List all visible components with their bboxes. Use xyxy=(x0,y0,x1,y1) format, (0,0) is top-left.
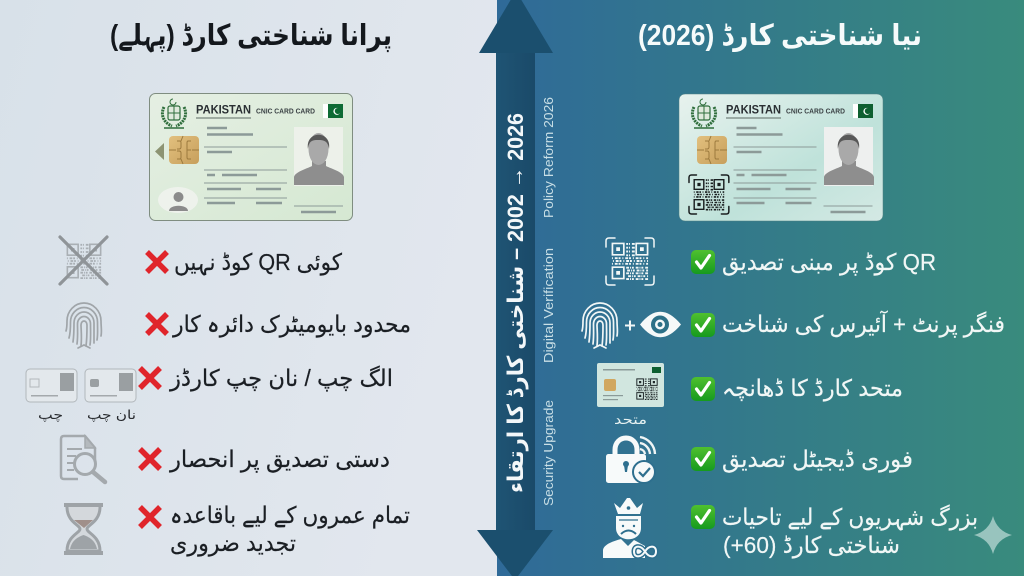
row 2 left: limited biometrics xyxy=(66,303,411,348)
old ID card: CNIC CARD CARD xyxy=(256,106,316,116)
timeline side labels: Digital Verification xyxy=(542,248,556,363)
icon: fingerprint xyxy=(66,303,101,348)
row 4 left: manual verification xyxy=(61,436,390,482)
timeline side labels: Policy Reform 2026 xyxy=(542,97,556,218)
flag xyxy=(853,104,873,118)
row 3 right: unified card xyxy=(597,363,903,427)
double-headed timeline arrow xyxy=(477,0,553,576)
emblem xyxy=(692,99,716,128)
chip xyxy=(697,136,727,164)
icon: QR xyxy=(606,238,654,285)
icon: hourglass xyxy=(64,503,103,555)
icon: fingerprint xyxy=(582,303,617,348)
row 5 left: regular renewal: تجدید ضروری xyxy=(170,530,296,557)
row 2 right: fingerprint and iris xyxy=(582,303,1005,348)
old ID card xyxy=(150,94,352,220)
icon: non-chip card xyxy=(85,369,136,402)
row 2 right: fingerprint and iris: فنگر پرنٹ + آئیرس کی شناخت xyxy=(722,310,1005,338)
card QR code xyxy=(689,175,729,214)
icon: plus xyxy=(625,320,635,330)
row 1 left: no QR: کوئی QR کوڈ نہیں xyxy=(174,249,342,276)
row 5 right: lifetime ID for seniors: بزرگ شہریوں کے لیے تاحیات xyxy=(722,504,978,531)
emblem xyxy=(162,99,186,128)
row 5 right: lifetime ID for seniors xyxy=(603,498,978,559)
row 1 right: QR verification xyxy=(606,238,936,285)
chip xyxy=(155,136,199,164)
row 4 right: instant digital verification: فوری ڈیجیٹل تصدیق xyxy=(722,446,913,473)
card title: PAKISTAN xyxy=(196,104,251,116)
icon: lock with signal and check xyxy=(606,437,655,483)
row 1 right: QR verification: QR کوڈ پر مبنی تصدیق xyxy=(722,249,936,276)
heading: new card: نیا شناختی کارڈ (2026) xyxy=(638,20,922,52)
row 2 left: limited biometrics: محدود بایومیٹرک دائرہ کار xyxy=(172,311,411,338)
icon: crossed QR xyxy=(60,237,107,284)
new ID card: CNIC CARD CARD xyxy=(786,106,846,116)
flag xyxy=(323,104,343,118)
timeline side labels: Security Upgrade xyxy=(542,400,556,506)
row 3 left: separate chip and non-chip: نان چپ xyxy=(87,408,136,422)
photo xyxy=(294,127,344,186)
row 3 right: unified card: متحد کارڈ کا ڈھانچہ xyxy=(722,375,903,402)
row 3 left: separate chip and non-chip: الگ چپ / نان چپ کارڈز xyxy=(169,365,393,392)
panel: new card background xyxy=(497,0,1024,576)
icon: unified card xyxy=(597,363,664,407)
row 5 left: regular renewal: تمام عمروں کے لیے باقاعدہ xyxy=(170,502,410,529)
icon: senior with crown and infinity xyxy=(603,498,656,558)
icon: document with magnifier xyxy=(61,436,105,482)
row 3 right: unified card: متحد xyxy=(614,412,647,427)
row 4 right: instant digital verification xyxy=(606,437,913,483)
row 1 left: no QR xyxy=(60,237,342,284)
heading: old card: پرانا شناختی کارڈ (پہلے) xyxy=(110,20,392,53)
icon: chip card xyxy=(26,369,77,402)
icon: eye xyxy=(640,312,681,337)
timeline side labels xyxy=(542,97,556,506)
card title: PAKISTAN xyxy=(726,104,781,116)
row 5 right: lifetime ID for seniors: شناختی کارڈ (60+) xyxy=(723,532,900,559)
row 3 left: separate chip and non-chip: چپ xyxy=(38,408,63,422)
decorative sparkle xyxy=(974,516,1012,554)
row 4 left: manual verification: دستی تصدیق پر انحصار xyxy=(169,446,390,473)
new ID card xyxy=(679,94,883,221)
photo xyxy=(824,127,874,186)
row 5 left: regular renewal xyxy=(64,502,410,557)
arrow title: evolution of the identity card: 2002 → 2026 – شناختی کارڈ کا ارتقاء xyxy=(503,113,528,493)
panel: old card background xyxy=(0,0,500,576)
row 3 left: separate chip and non-chip xyxy=(26,365,393,422)
ghost photo xyxy=(158,187,198,213)
